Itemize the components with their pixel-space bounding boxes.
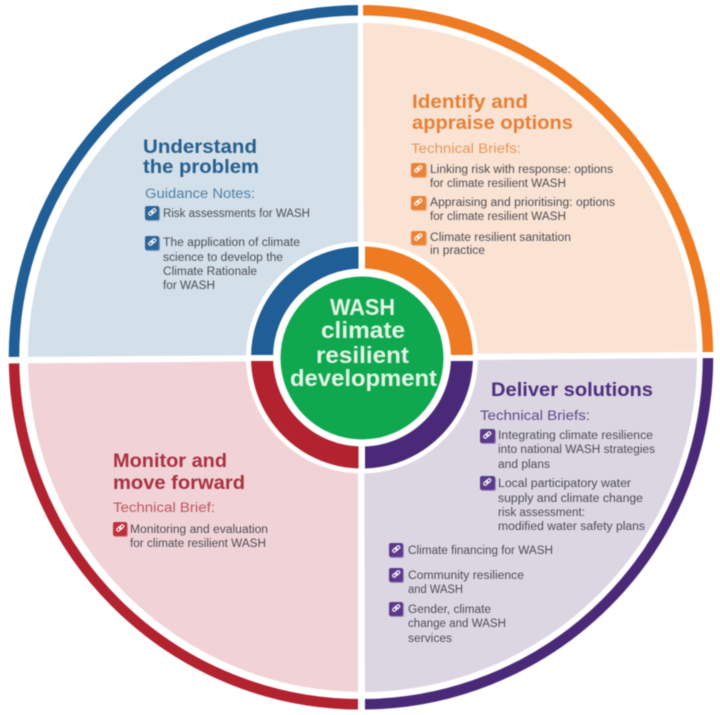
- list: technical briefs: Gender, climate: [408, 604, 491, 616]
- list: technical briefs: in practice: [430, 245, 485, 257]
- list: technical briefs: for climate resilient WASH: [430, 211, 566, 223]
- icon: link: [145, 206, 160, 221]
- list: technical brief: for climate resilient WASH: [130, 538, 266, 550]
- quadrant background: understand: [28, 23, 362, 358]
- list: guidance notes: [145, 206, 310, 292]
- outer arc: identify: [361, 10, 708, 357]
- quadrant background: deliver: [362, 358, 697, 692]
- list: guidance notes: Climate Rationale: [163, 266, 257, 278]
- list: technical briefs: supply and climate change: [498, 493, 643, 505]
- quadrant background: identify: [362, 23, 697, 358]
- centre hub: [246, 242, 478, 474]
- title: WASH climate resilient development: WASH: [330, 294, 395, 320]
- panel: monitor and move forward: [14, 357, 362, 704]
- list: technical briefs: Community resilience: [408, 570, 524, 582]
- panel: understand the problem: [14, 10, 362, 358]
- title: WASH climate resilient development: climate: [321, 317, 405, 343]
- icon: link: [411, 163, 427, 178]
- list: technical briefs: Integrating climate resilience: [498, 430, 653, 442]
- outer arc: deliver: [361, 357, 708, 704]
- hub ring: red: [262, 358, 362, 458]
- list: guidance notes: Risk assessments for WASH: [163, 208, 310, 220]
- list: technical briefs: risk assessment:: [498, 507, 585, 519]
- icon: link: [389, 543, 404, 558]
- icon: link: [389, 568, 404, 583]
- heading: monitor and move forward: [113, 451, 245, 494]
- title: WASH climate resilient development: [290, 294, 437, 391]
- icon: link: [145, 236, 160, 251]
- subheading: technical briefs: Technical Briefs:: [480, 408, 590, 423]
- list: technical briefs: services: [408, 633, 452, 645]
- panel: identify and appraise options: [361, 10, 708, 358]
- list: guidance notes: The application of climate: [163, 237, 300, 249]
- heading: monitor and move forward: move forward: [113, 473, 245, 494]
- subheading: guidance notes: Guidance Notes:: [145, 186, 255, 201]
- subheading: technical brief: Technical Brief:: [113, 500, 215, 515]
- list: technical briefs: and plans: [498, 459, 550, 471]
- heading: understand the problem: the problem: [143, 157, 259, 178]
- heading: deliver solutions: Deliver solutions: [491, 380, 653, 401]
- list: technical briefs: modified water safety plans: [498, 521, 645, 533]
- outer arc: understand: [14, 10, 361, 357]
- hub ring: orange: [362, 258, 462, 358]
- list: technical briefs: [411, 163, 615, 257]
- heading: monitor and move forward: Monitor and: [113, 451, 227, 472]
- list: technical brief: [113, 522, 268, 550]
- title: WASH climate resilient development: resilient: [316, 342, 409, 368]
- list: guidance notes: for WASH: [163, 280, 215, 292]
- icon: link: [389, 602, 404, 617]
- icon: link: [411, 231, 427, 246]
- heading: identify and appraise options: Identify and: [412, 92, 528, 113]
- list: technical briefs: into national WASH strategies: [498, 444, 655, 456]
- list: technical briefs: and WASH: [408, 584, 463, 596]
- list: technical briefs: change and WASH: [408, 618, 506, 630]
- heading: understand the problem: Understand: [143, 137, 257, 158]
- list: technical briefs: for climate resilient WASH: [430, 178, 566, 190]
- icon: link: [411, 196, 427, 211]
- heading: identify and appraise options: [412, 92, 573, 134]
- outer arc: monitor: [14, 357, 361, 704]
- quadrant background: monitor: [28, 358, 362, 692]
- list: technical briefs: [389, 429, 655, 645]
- hub white backing: [246, 242, 478, 474]
- icon: link: [480, 429, 496, 444]
- green circle: [280, 276, 444, 440]
- heading: identify and appraise options: appraise options: [412, 113, 573, 134]
- icon: link: [480, 476, 496, 491]
- list: guidance notes: science to develop the: [163, 252, 283, 264]
- hub ring: blue: [262, 258, 362, 358]
- subheading: technical briefs: Technical Briefs:: [411, 141, 521, 156]
- hub ring: purple: [362, 358, 462, 458]
- list: technical briefs: Linking risk with response: options: [430, 164, 613, 176]
- icon: link: [113, 522, 128, 537]
- heading: understand the problem: [143, 137, 259, 178]
- list: technical briefs: Appraising and prioritising: options: [430, 197, 615, 209]
- list: technical brief: Monitoring and evaluation: [130, 524, 268, 536]
- list: technical briefs: Climate resilient sanitation: [430, 232, 571, 244]
- list: technical briefs: Local participatory water: [498, 478, 631, 490]
- list: technical briefs: Climate financing for WASH: [408, 545, 553, 557]
- panel: deliver solutions: [361, 357, 708, 704]
- title: WASH climate resilient development: development: [290, 365, 437, 391]
